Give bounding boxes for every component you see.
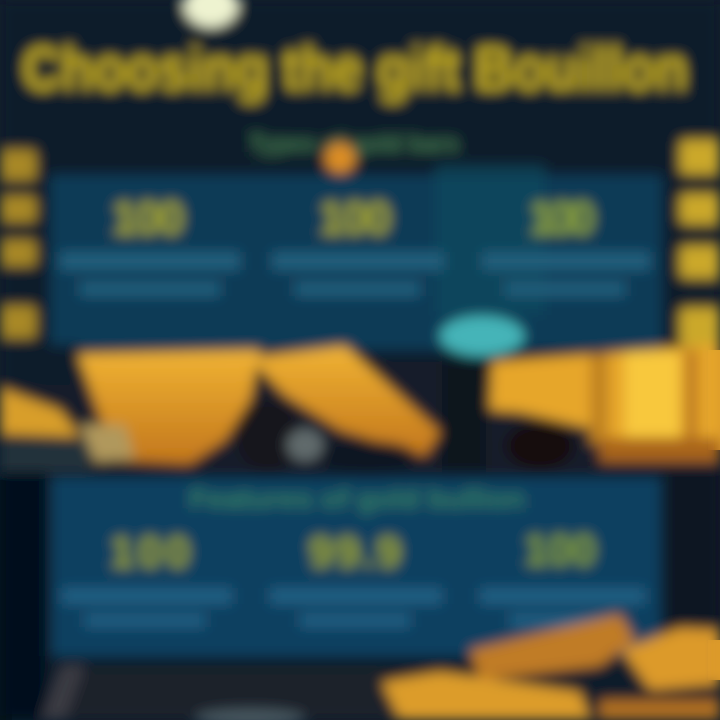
- right dark edge: [670, 470, 720, 620]
- gold bar lower: [382, 672, 590, 720]
- gold bar bottom right: [600, 700, 720, 720]
- upper descriptions: [60, 252, 650, 296]
- stat 1: 100: [112, 192, 184, 244]
- dark circle right: [506, 422, 574, 470]
- dark shapes under bars: [236, 400, 300, 472]
- gold bar upper: [470, 614, 635, 680]
- gold bar left edge: [0, 388, 80, 437]
- teal column highlight: [435, 165, 545, 315]
- panel: lower teal: [52, 478, 660, 656]
- icon: orange coin: [325, 143, 355, 173]
- teal glow: [440, 316, 524, 356]
- top strip: [0, 0, 720, 22]
- dark bar seams: [590, 354, 608, 444]
- stat 6: 100: [524, 526, 596, 575]
- lower stats: [110, 526, 596, 577]
- top light: [184, 0, 238, 27]
- left side labels: [0, 150, 36, 338]
- bottom floor: [40, 670, 400, 720]
- subheading: Types of gold bars: [249, 130, 459, 158]
- band upper left: [0, 345, 80, 385]
- right side labels: [680, 140, 720, 346]
- gold bar centre right: [250, 346, 440, 456]
- lower descriptions: [62, 588, 645, 627]
- gold bar right: [622, 628, 720, 690]
- stat 3: 100: [529, 192, 595, 244]
- lower heading: Features of gold bullion: [190, 483, 524, 514]
- stat 4: 100: [110, 528, 190, 577]
- orange lower edge: [600, 438, 720, 462]
- panel: upper teal: [50, 175, 662, 350]
- floor diagonal stroke: [40, 665, 85, 720]
- pale floor patch: [195, 709, 305, 720]
- stat 2: 100: [319, 192, 391, 244]
- gold bar centre left: [78, 350, 260, 464]
- dark band: [0, 362, 720, 472]
- gold bars right: [490, 344, 720, 456]
- pale bar: [80, 425, 135, 462]
- bright bar segment: [625, 352, 680, 437]
- stat 5: 99.9: [309, 528, 401, 577]
- band lower left grey: [0, 440, 90, 472]
- left dark edge: [0, 470, 45, 720]
- upper stats: [112, 192, 595, 244]
